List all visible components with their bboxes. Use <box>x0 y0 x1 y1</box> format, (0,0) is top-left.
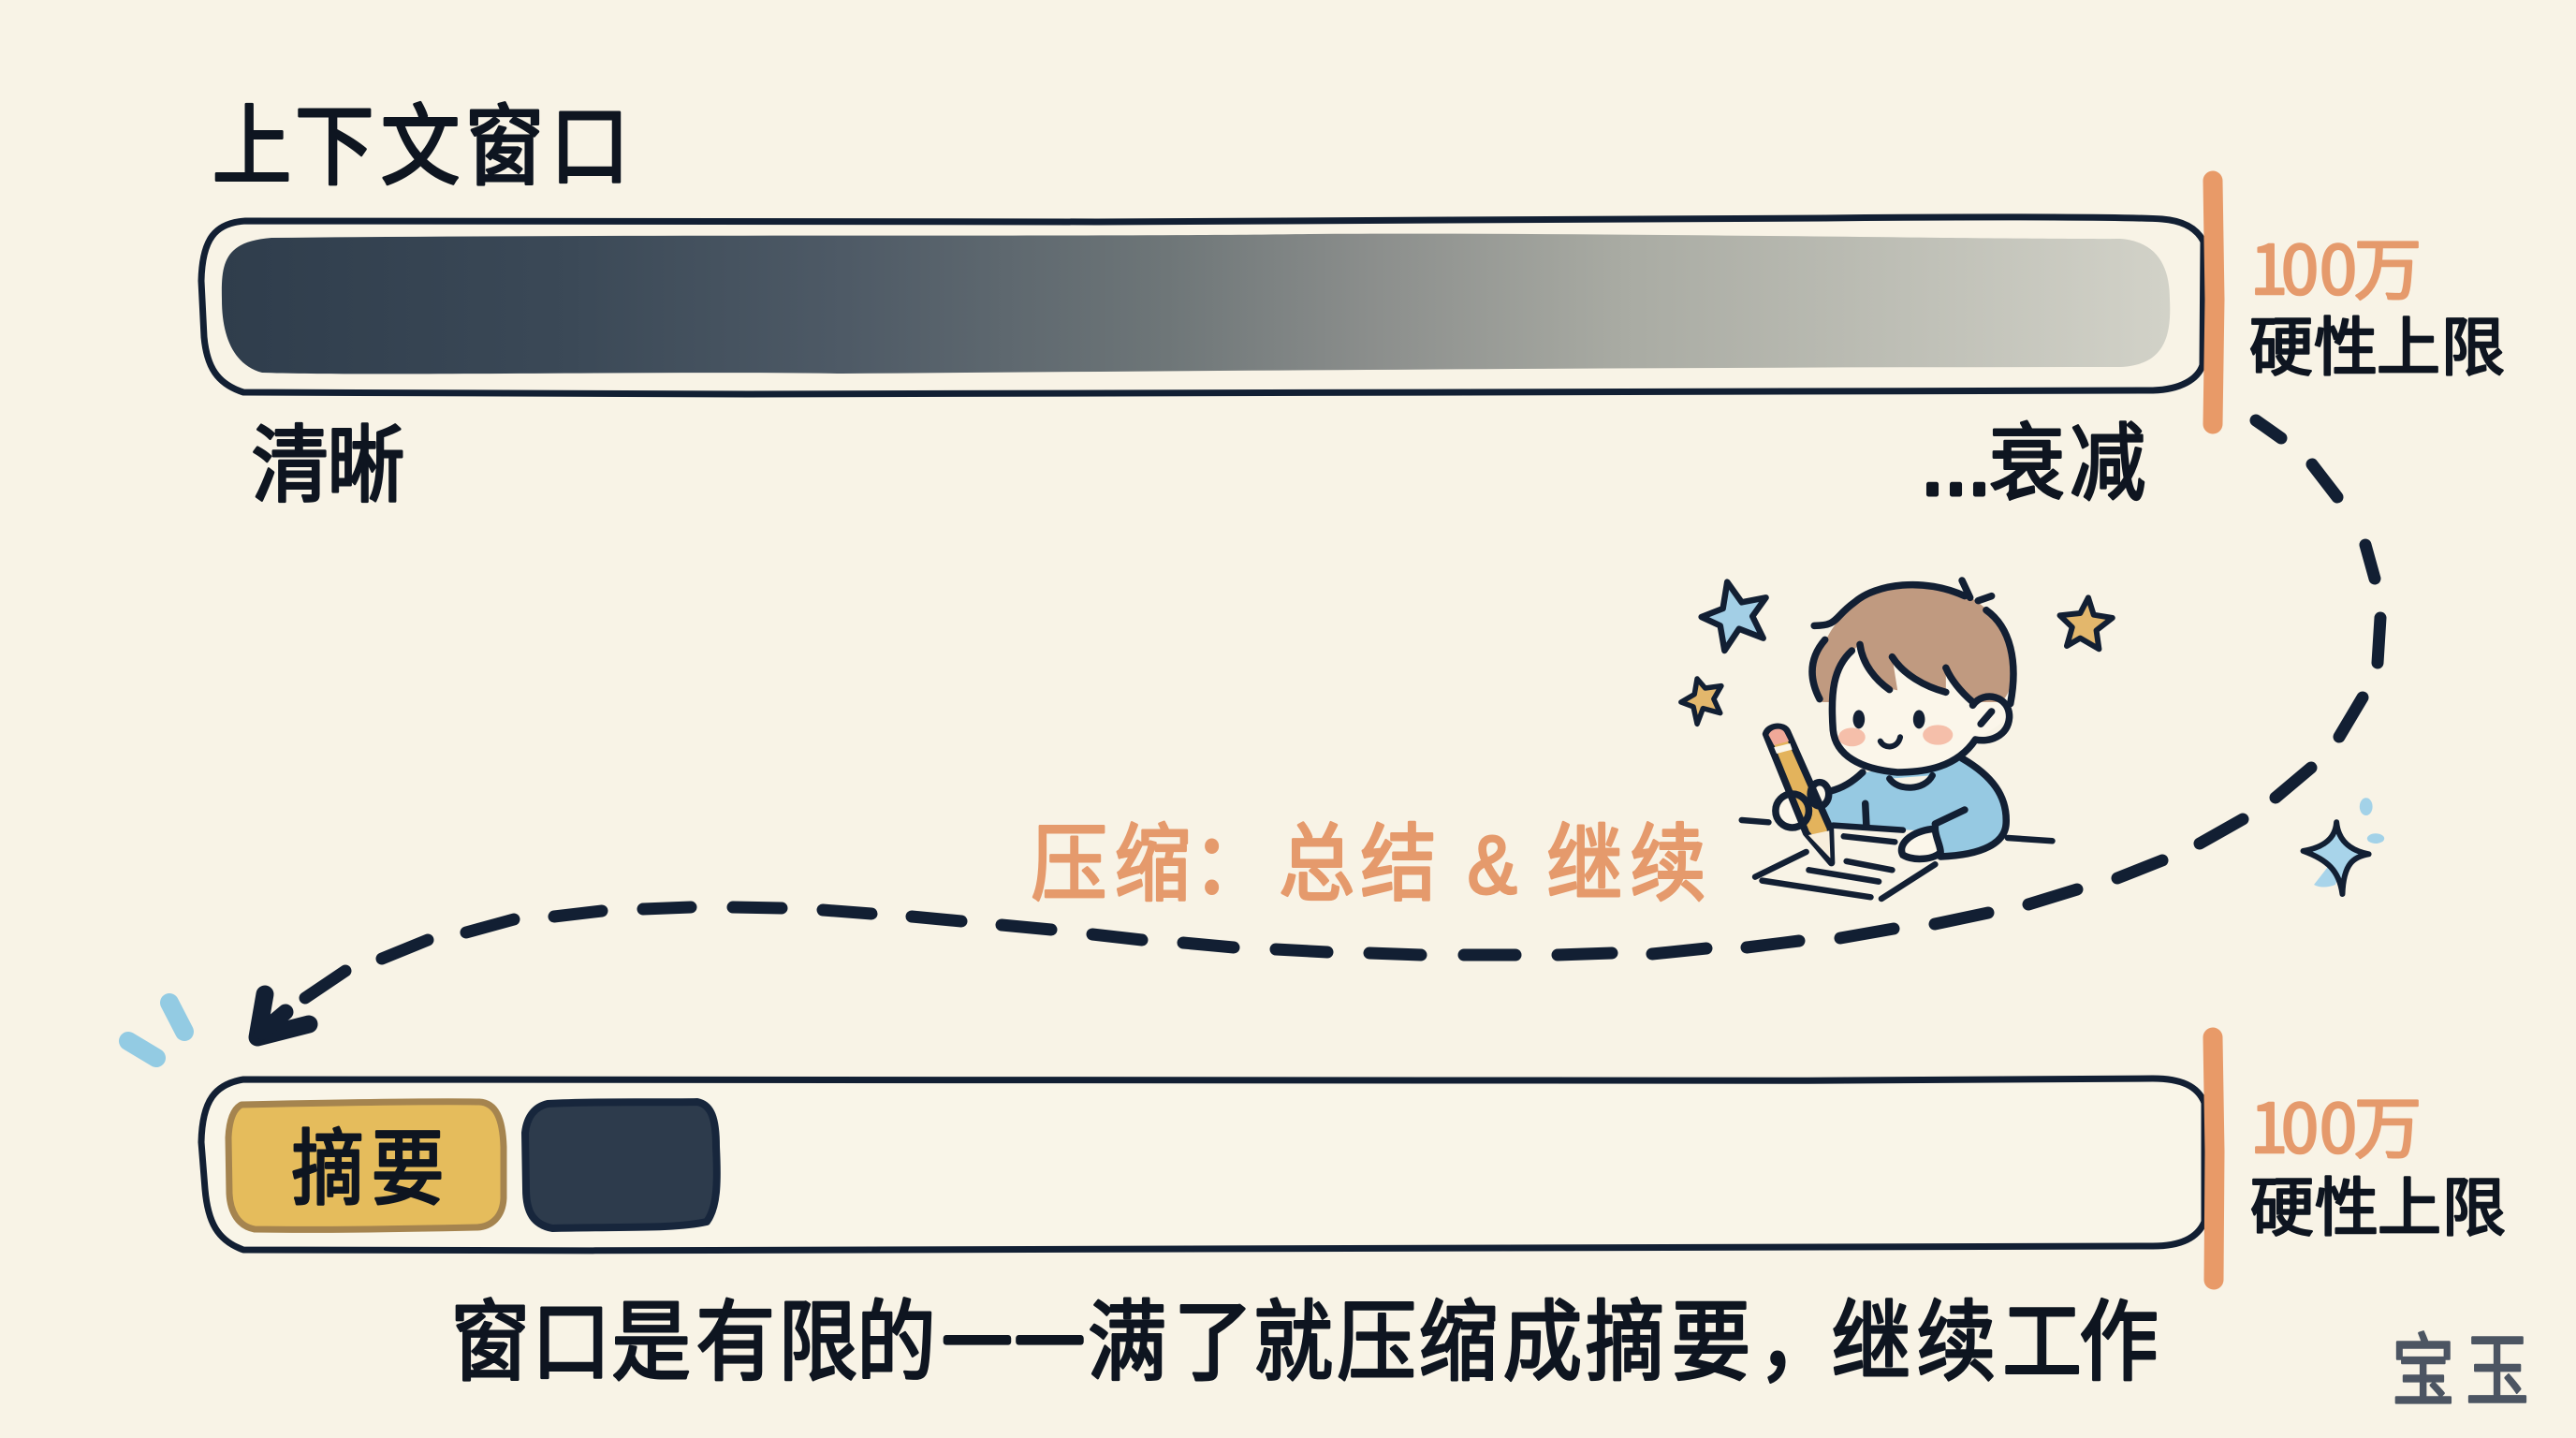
dashed arrow: compaction path <box>257 420 2380 1037</box>
compaction label: 总结 <box>1279 796 1437 917</box>
summary label: 摘要 <box>292 1102 444 1221</box>
top bar fading fill <box>222 234 2170 374</box>
accent ticks near arrow <box>128 1003 184 1058</box>
signature: 宝玉 <box>2392 1308 2529 1421</box>
top limit value: 1 <box>2250 215 2288 314</box>
bottom limit value: 万 <box>2354 1074 2422 1172</box>
pencil <box>1766 726 1832 863</box>
body <box>1822 758 2008 857</box>
remaining content block <box>525 1102 717 1228</box>
icon: gold star right <box>2060 597 2113 649</box>
desk and paper lines <box>1742 820 2052 899</box>
compaction label: 继续 <box>1546 796 1706 917</box>
bottom context bar <box>201 1078 2204 1251</box>
top limit caption: 硬性上限 <box>2249 296 2505 389</box>
arrow head <box>257 994 309 1037</box>
cheeks <box>1838 725 1953 746</box>
top limit value: 万 <box>2354 215 2422 314</box>
eyes and mouth <box>1853 710 1925 746</box>
top context bar <box>201 217 2203 394</box>
icon: gold star left <box>1681 679 1721 724</box>
summary block <box>228 1102 504 1229</box>
bottom limit value: 00 <box>2281 1074 2357 1172</box>
compaction label: & <box>1468 818 1517 911</box>
illustration: child writing <box>1681 580 2113 899</box>
hair <box>1815 583 2013 702</box>
icon: blue sparkle <box>2304 798 2384 894</box>
left hand fill <box>1776 783 1829 828</box>
takeaway sentence: 窗口是有限的 <box>451 1270 936 1398</box>
top limit value: 00 <box>2281 215 2357 314</box>
label: decay: 衰减 <box>1989 395 2145 517</box>
top hard limit marker <box>2213 181 2215 424</box>
bottom limit value: 1 <box>2250 1074 2288 1172</box>
label: decay: ... <box>1921 411 1991 515</box>
right hand <box>1901 829 1940 858</box>
icon: blue star <box>1702 582 1766 651</box>
bottom hard limit marker <box>2213 1037 2215 1280</box>
left hand outline <box>1776 783 1829 828</box>
label: clear: 清晰 <box>252 397 404 519</box>
takeaway sentence: 满了就压缩成摘要，继续工作 <box>1088 1270 2159 1398</box>
takeaway sentence: —— <box>941 1277 1086 1394</box>
title: 上下文窗口 <box>212 75 629 202</box>
bottom limit caption: 硬性上限 <box>2250 1156 2506 1249</box>
compaction label: 压缩： <box>1032 796 1268 917</box>
top bar outline <box>201 217 2203 394</box>
face <box>1832 646 2011 772</box>
head outlines <box>1812 580 2013 772</box>
bottom bar outline <box>201 1078 2204 1251</box>
